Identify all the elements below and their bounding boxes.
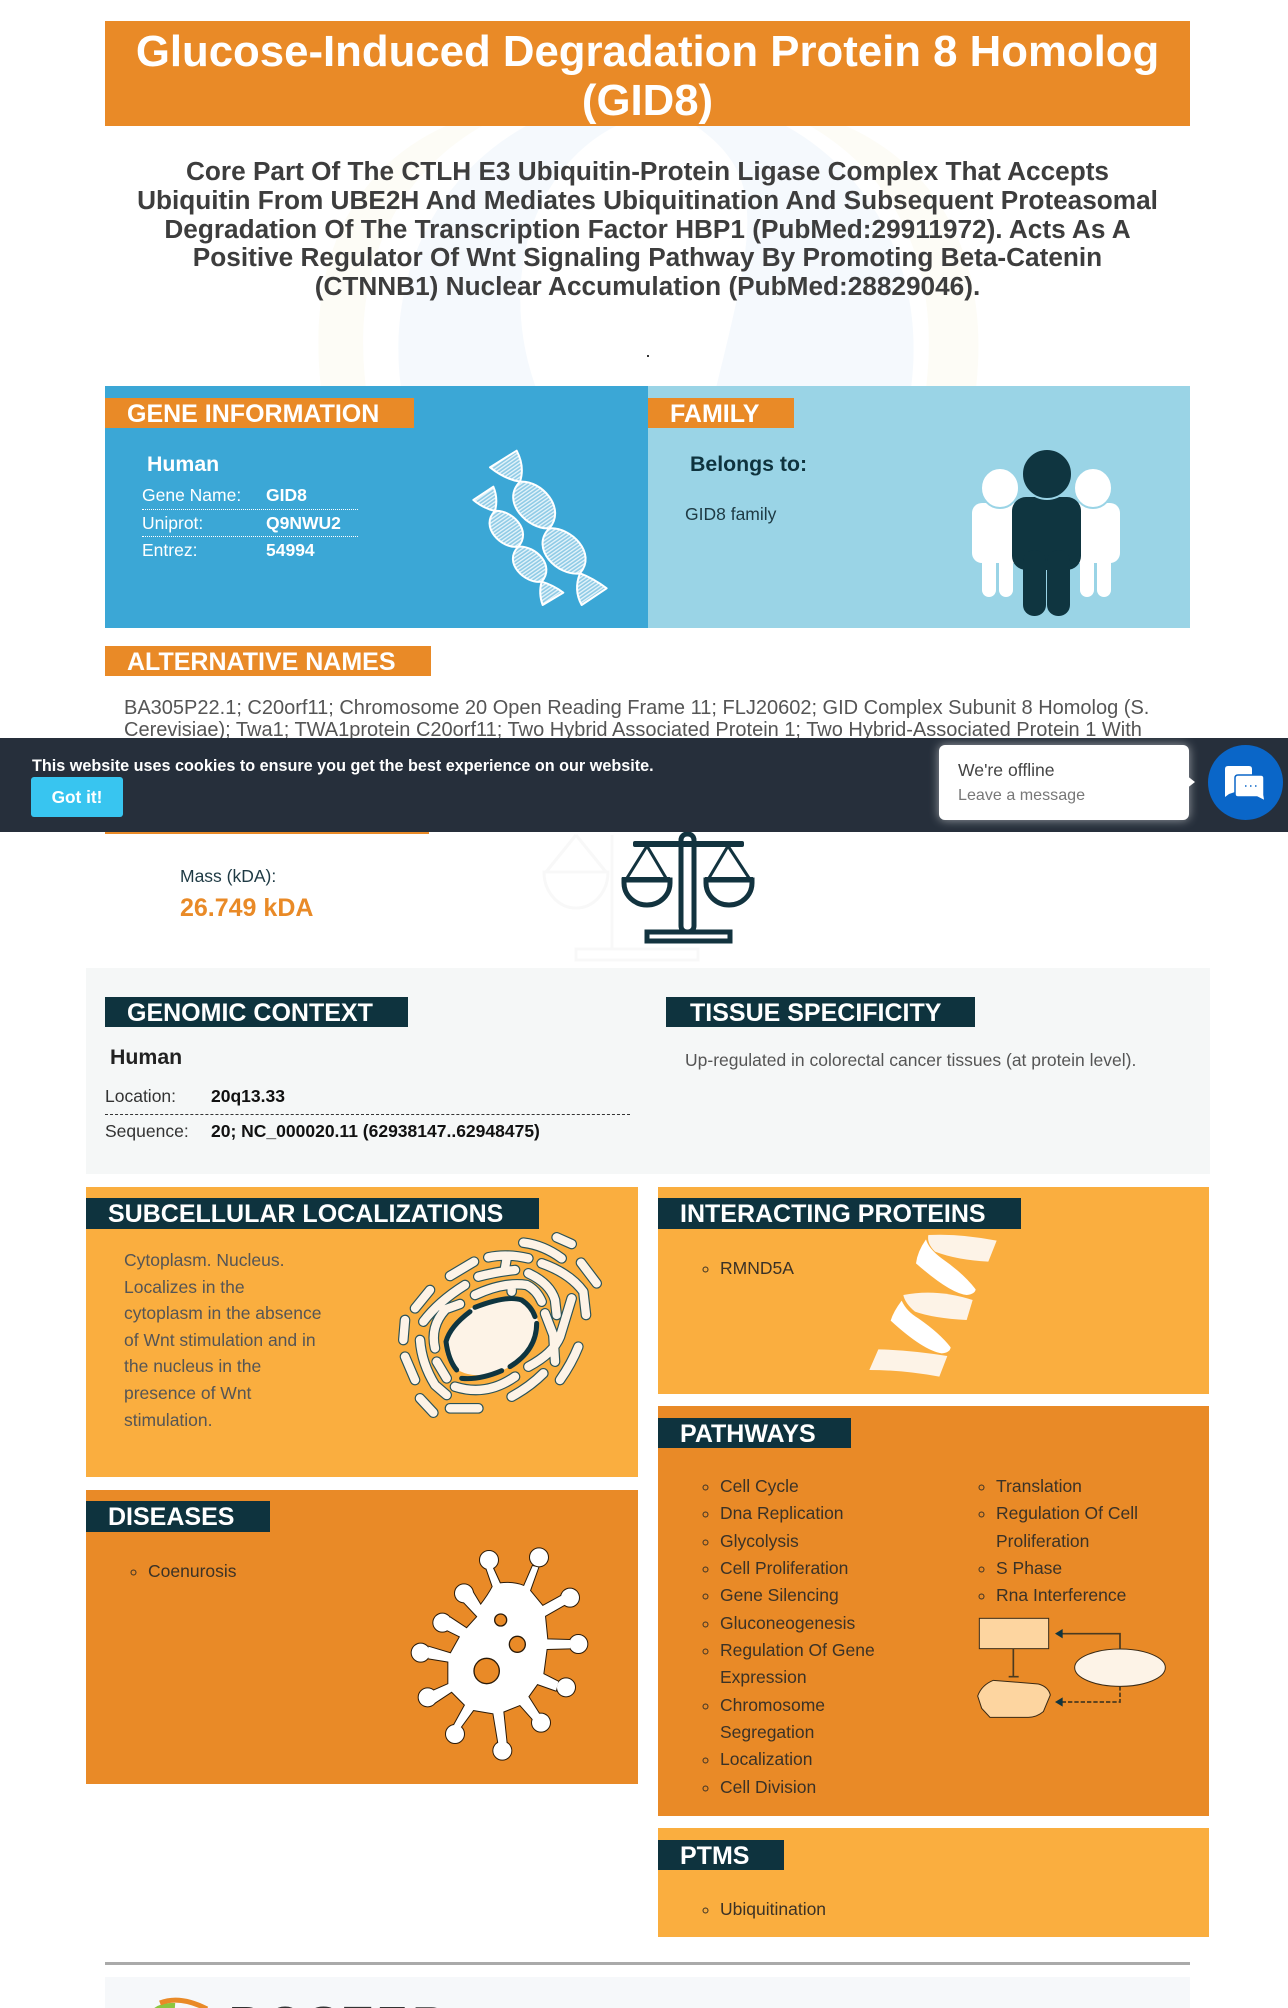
heading: family: FAMILY: [670, 400, 759, 428]
heading: alternative names: ALTERNATIVE NAMES: [127, 648, 396, 676]
panel: genomic context and tissue specificity: [86, 968, 1210, 1174]
pathways list column 2: Rna Interference: [996, 1585, 1126, 1605]
panel: diseases: [86, 1490, 638, 1784]
pathways list column 2: Translation: [996, 1476, 1082, 1496]
watermark logo: [318, 126, 978, 386]
button: got it: [31, 777, 123, 817]
gene table: Gene Name:: [142, 485, 241, 505]
localization text: cytoplasm in the absence: [124, 1303, 321, 1323]
cookie message: This website uses cookies to ensure you get the best experience on our website.: [32, 757, 654, 775]
divider: [105, 1962, 1190, 1965]
panel: subcellular localizations: [86, 1187, 638, 1477]
icon: dna: [472, 450, 608, 606]
alternative names text: BA305P22.1; C20orf11; Chromosome 20 Open Reading Frame 11; FLJ20602; GID Complex Subunit 8 Homolog (S.: [124, 697, 1149, 719]
interacting proteins list: RMND5A: [720, 1258, 794, 1278]
heading: gene information: GENE INFORMATION: [127, 400, 379, 428]
genomic table: Sequence:: [105, 1121, 189, 1141]
heading: subcellular localizations: SUBCELLULAR LOCALIZATIONS: [108, 1200, 503, 1228]
ptms list: Ubiquitination: [720, 1899, 826, 1919]
pathways list column 2: Regulation Of Cell: [996, 1503, 1138, 1523]
callout pointer: [1186, 775, 1195, 789]
icon: pathway diagram: [977, 1618, 1166, 1718]
chat callout: [939, 745, 1189, 820]
panel: interacting proteins: [658, 1187, 1209, 1394]
chat status: We're offline: [958, 760, 1055, 780]
icon: people: [972, 450, 1120, 616]
summary text: Core Part Of The CTLH E3 Ubiquitin-Protein Ligase Complex That Accepts: [186, 156, 1109, 186]
pathways list column 2: Proliferation: [996, 1531, 1089, 1551]
genomic table: 20; NC_000020.11 (62938147..62948475): [211, 1121, 540, 1141]
chat prompt: Leave a message: [958, 786, 1085, 804]
genomic table: 20q13.33: [211, 1086, 285, 1106]
heading: ptms: [658, 1840, 784, 1870]
gene table: Entrez:: [142, 540, 197, 560]
pathways list column 1: Glycolysis: [720, 1531, 799, 1551]
heading: genomic context: GENOMIC CONTEXT: [127, 999, 373, 1027]
panel: family: [648, 386, 1190, 628]
localization text: stimulation.: [124, 1410, 213, 1430]
alternative names text: Cerevisiae); Twa1; TWA1protein C20orf11; Two Hybrid Associated Protein 1; Two Hybrid-Associated Protein 1 With: [124, 719, 1142, 741]
heading underline: molecular mass: [105, 830, 429, 834]
pathways list column 1: Gluconeogenesis: [720, 1613, 855, 1633]
pathways list column 1: [702, 1476, 875, 1797]
panel: ptms: [658, 1828, 1209, 1937]
pathways list column 1: Gene Silencing: [720, 1585, 839, 1605]
diseases list: Coenurosis: [148, 1561, 237, 1581]
summary text: Positive Regulator Of Wnt Signaling Pathway By Promoting Beta-Catenin: [193, 242, 1102, 272]
belongs to label: Belongs to:: [690, 452, 807, 476]
localization text: of Wnt stimulation and in: [124, 1330, 316, 1350]
panel: gene information: [105, 386, 648, 628]
footer logo: [154, 1998, 208, 2008]
gene table: 54994: [266, 540, 315, 560]
pathways list column 1: Cell Proliferation: [720, 1558, 848, 1578]
icon: ribbon helix: [869, 1234, 997, 1377]
alternative names text: [124, 697, 1149, 741]
gene table: GID8: [266, 485, 307, 505]
summary text: Degradation Of The Transcription Factor HBP1 (PubMed:29911972). Acts As A: [164, 214, 1131, 244]
dot: [647, 355, 649, 357]
pathways list column 1: Segregation: [720, 1722, 814, 1742]
mass label: Mass (kDA):: [180, 866, 276, 886]
genomic table: Location:: [105, 1086, 176, 1106]
gene table: Uniprot:: [142, 513, 203, 533]
button: chat: [1208, 745, 1283, 820]
localization text: the nucleus in the: [124, 1356, 261, 1376]
pathways list column 1: Cell Division: [720, 1777, 816, 1797]
pathways list column 1: Dna Replication: [720, 1503, 844, 1523]
tissue specificity text: Up-regulated in colorectal cancer tissues (at protein level).: [685, 1050, 1136, 1070]
species label: Human: [147, 452, 219, 476]
gene table: Q9NWU2: [266, 513, 341, 533]
panel: pathways: [658, 1406, 1209, 1816]
pathways list column 1: Regulation Of Gene: [720, 1640, 875, 1660]
title banner: Glucose-Induced Degradation Protein 8 Homolog: [136, 27, 1159, 76]
summary text: (CTNNB1) Nuclear Accumulation (PubMed:28829046).: [315, 271, 980, 301]
pathways list column 1: Cell Cycle: [720, 1476, 799, 1496]
heading: pathways: [658, 1418, 851, 1448]
heading: tissue specificity: TISSUE SPECIFICITY: [690, 999, 941, 1027]
icon: chat bubbles: [1225, 766, 1264, 800]
localization text: presence of Wnt: [124, 1383, 251, 1403]
faint scale watermark: [540, 832, 705, 962]
heading: interacting proteins: INTERACTING PROTEINS: [680, 1200, 986, 1228]
cookie bar: [0, 738, 1288, 832]
heading: ptms: PTMS: [680, 1842, 749, 1870]
summary text: Ubiquitin From UBE2H And Mediates Ubiquitination And Subsequent Proteasomal: [137, 185, 1158, 215]
icon: balance scale: [622, 832, 754, 944]
title banner: [105, 21, 1190, 126]
summary text: [137, 156, 1158, 301]
title banner: (GID8): [582, 76, 713, 125]
mass value: 26.749 kDA: [180, 894, 313, 922]
pathways list column 1: Localization: [720, 1749, 812, 1769]
localization text: [124, 1250, 321, 1430]
pathways list column 2: [978, 1476, 1138, 1605]
localization text: Localizes in the: [124, 1277, 245, 1297]
icon: organelle: [398, 1232, 602, 1418]
heading: diseases: [86, 1501, 270, 1532]
species label: Human: [110, 1045, 182, 1069]
heading: pathways: PATHWAYS: [680, 1420, 816, 1448]
button: got it: Got it!: [52, 787, 102, 807]
genomic table: [105, 1086, 630, 1141]
heading: family: [648, 398, 794, 428]
localization text: Cytoplasm. Nucleus.: [124, 1250, 284, 1270]
pathways list column 2: S Phase: [996, 1558, 1062, 1578]
icon: virus: [410, 1547, 588, 1761]
pathways list column 1: Chromosome: [720, 1695, 825, 1715]
gene table: [142, 485, 358, 560]
family value: GID8 family: [685, 504, 776, 524]
footer panel: [105, 1977, 1190, 2008]
pathways list column 1: Expression: [720, 1667, 807, 1687]
heading: diseases: DISEASES: [108, 1503, 234, 1531]
